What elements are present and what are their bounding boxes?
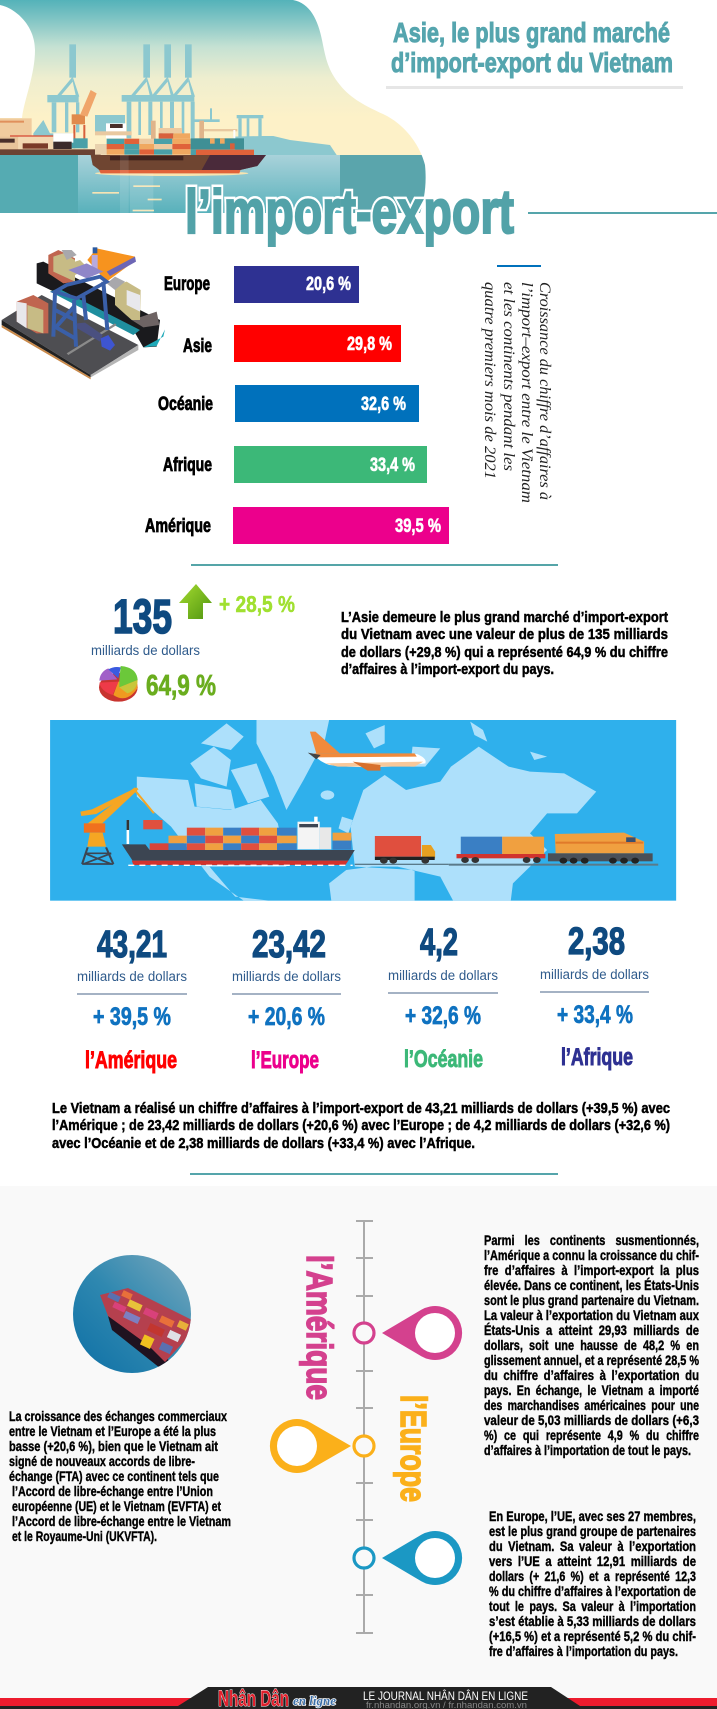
text block: Asia summary: de dollars (+29,8 %) qui a représenté 64,9 % du chiffre [341, 644, 668, 661]
stat: Asia 135 billion: 64,9 % [146, 670, 216, 702]
title [391, 17, 673, 78]
icon: airplane [308, 732, 426, 771]
timeline axis [356, 1221, 373, 1633]
bar: Océanie: Océanie [158, 394, 213, 415]
icon: freight train [449, 833, 658, 866]
text block: Asia summary: du Vietnam avec une valeur de plus de 135 milliards [341, 626, 668, 643]
stat column: Europe: 23,42 [252, 924, 326, 966]
stat column: Océanie: l’Océanie [404, 1046, 483, 1073]
stat column: Afrique: 2,38 [568, 921, 625, 963]
rotated chart caption: et les continents pendant les [500, 282, 517, 471]
icon: container ship [122, 817, 355, 865]
text block: Europe details [489, 1508, 696, 1659]
bar: Océanie: 32,6 % [361, 394, 406, 415]
stat column: Amérique: + 39,5 % [93, 1003, 171, 1031]
logo: Nhân Dân en ligne: en ligne [293, 1693, 336, 1708]
bar: Europe: Europe [164, 274, 210, 295]
stat column: Afrique: milliards de dollars [540, 967, 649, 982]
icon: green up arrow [179, 584, 212, 619]
footer band with logo [0, 1686, 717, 1709]
photo: aerial container ship [73, 1255, 192, 1373]
icon: pink map pin with node [354, 1306, 462, 1360]
bar: Afrique: 33,4 % [370, 455, 415, 476]
icon: isometric container port [2, 247, 165, 379]
text block: Asia summary: d’affaires à l’import-export du pays. [341, 661, 554, 678]
text block: Europe trade growth: échange (FTA) avec ce continent tels que [9, 1468, 219, 1484]
icon: orange map pin with node [270, 1419, 374, 1473]
stat column: Afrique: l’Afrique [561, 1044, 633, 1071]
rotated chart caption: l’import–export entre le Vietnam [518, 282, 535, 503]
bar: Asie [183, 325, 401, 362]
text block: Europe trade growth: et le Royaume-Uni (UKVFTA). [12, 1528, 157, 1544]
map illustration: world map with transport [50, 720, 676, 901]
stat column: Amérique: milliards de dollars [77, 969, 187, 984]
text block: continents summary: avec l’Océanie et de 2,38 milliards de dollars (+33,4 %) avec l’Afrique. [52, 1135, 475, 1152]
bar: Asie: Asie [183, 336, 212, 357]
bar: Amérique [145, 507, 449, 544]
stat column: Océanie [388, 922, 498, 1073]
bar: Europe: 20,6 % [306, 274, 351, 295]
text block: Europe trade growth: signé de nouveaux accords de libre- [9, 1453, 195, 1469]
bar: Asie: 29,8 % [347, 334, 392, 355]
text block: Europe trade growth: l’Accord de libre-échange entre l’Union [12, 1483, 213, 1499]
icon: blue map pin with node [354, 1531, 462, 1585]
vertical heading: l'Europe: l’Europe [393, 1395, 434, 1502]
vertical heading: l'Amérique: l’Amérique [299, 1255, 340, 1400]
text block: continents summary [52, 1100, 670, 1152]
text block: Europe trade growth [9, 1408, 231, 1544]
stat column: Afrique [540, 921, 649, 1071]
stat column: Europe: l’Europe [251, 1047, 319, 1074]
bar: Europe [164, 266, 359, 303]
rotated chart caption: quatre premiers mois de 2021 [481, 282, 498, 479]
rotated chart caption [481, 282, 553, 503]
text block: Europe trade growth: basse (+20,6 %), bien que le Vietnam ait [9, 1438, 218, 1454]
stat column: Amérique: 43,21 [97, 924, 167, 966]
text block: Europe trade growth: européenne (UE) et le Vietnam (EVFTA) et [12, 1498, 221, 1514]
stat column: Amérique [77, 924, 187, 1074]
bar: Océanie [158, 385, 419, 422]
text block: Amérique details [484, 1232, 699, 1458]
stat: Asia 135 billion [91, 584, 295, 702]
rotated chart caption: Croissance du chiffre d’affaires à [536, 282, 553, 500]
icon: 3D pie chart [99, 666, 138, 702]
hero illustration: port with cargo ship [0, 0, 430, 213]
stat column: Océanie: 4,2 [420, 922, 458, 964]
bar: Afrique: Afrique [163, 455, 212, 476]
text block: Asia summary [341, 609, 668, 678]
stat column: Europe: milliards de dollars [232, 969, 341, 984]
icon: port crane [80, 787, 162, 864]
text block: Europe trade growth: entre le Vietnam et l’Europe a été la plus [9, 1423, 216, 1439]
main heading: l'import-export: l’import-export [185, 178, 514, 247]
text block: Asia summary: L’Asie demeure le plus grand marché d’import-export [341, 609, 668, 626]
text block: Europe trade growth: La croissance des échanges commerciaux [9, 1408, 227, 1424]
stat column: Océanie: + 32,6 % [405, 1002, 481, 1030]
bar: Afrique [163, 446, 427, 483]
text block: Europe trade growth: l’Accord de libre-échange entre le Vietnam [12, 1513, 231, 1529]
footer text [363, 1688, 528, 1709]
stat column: Amérique: l’Amérique [85, 1047, 177, 1074]
icon: truck [355, 836, 449, 865]
stat: Asia 135 billion: milliards de dollars [91, 643, 200, 658]
stat column: Océanie: milliards de dollars [388, 968, 498, 983]
stat column: Europe [232, 924, 341, 1074]
stat column: Europe: + 20,6 % [248, 1003, 325, 1031]
bar: Amérique: Amérique [145, 516, 211, 537]
bar chart: growth by continent [145, 266, 449, 544]
bar: Amérique: 39,5 % [395, 516, 441, 537]
footer text: LE JOURNAL NHÂN DÂN EN LIGNE [363, 1688, 528, 1703]
stat: Asia 135 billion: + 28,5 % [219, 591, 295, 617]
stat: Asia 135 billion: 135 [113, 591, 172, 644]
stat column: Afrique: + 33,4 % [557, 1001, 633, 1029]
main heading: l'import-export: l’import-export [185, 178, 514, 247]
